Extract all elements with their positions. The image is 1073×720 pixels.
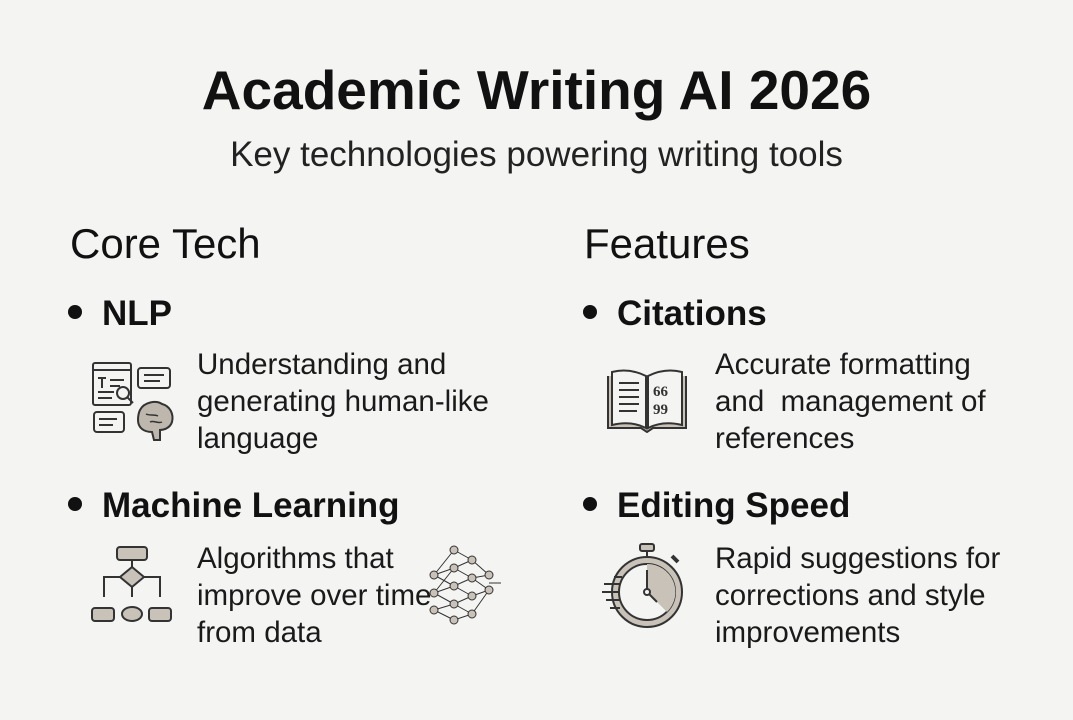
text: machine learning (197, 542, 431, 649)
icon: stopwatch (602, 543, 683, 628)
title: Academic Writing AI 2026 (202, 59, 871, 121)
text: editing speed: improvements (715, 616, 900, 649)
text: editing speed (715, 542, 1000, 649)
heading: core tech: Core Tech (70, 220, 261, 267)
text: editing speed: Rapid suggestions for (715, 542, 1000, 575)
text: machine learning: from data (197, 616, 322, 649)
subtitle: Key technologies powering writing tools (230, 135, 843, 174)
text: citations (715, 348, 986, 455)
heading: features: Features (584, 220, 750, 267)
icon: book: 99 (653, 402, 668, 418)
icon: flowchart (91, 546, 172, 622)
text: citations: Accurate formatting (715, 348, 971, 381)
text: machine learning: Algorithms that (197, 542, 394, 575)
text: editing speed: corrections and style (715, 579, 986, 612)
text: NLP: Understanding and (197, 348, 446, 381)
text: machine learning: improve over time (197, 579, 431, 612)
text: citations: references (715, 422, 854, 455)
item: editing speed: Editing Speed (617, 486, 850, 525)
text: NLP (197, 348, 489, 455)
icon: neural network (430, 546, 501, 624)
text: citations: and management of (715, 385, 986, 418)
item: machine learning: Machine Learning (102, 486, 400, 525)
item: citations: Citations (617, 294, 767, 333)
icon: NLP (92, 362, 174, 441)
item: NLP: NLP (102, 294, 172, 333)
icon: book: 66 (653, 384, 668, 400)
icon: book (607, 370, 687, 433)
text: NLP: generating human-like (197, 385, 489, 418)
text: NLP: language (197, 422, 318, 455)
